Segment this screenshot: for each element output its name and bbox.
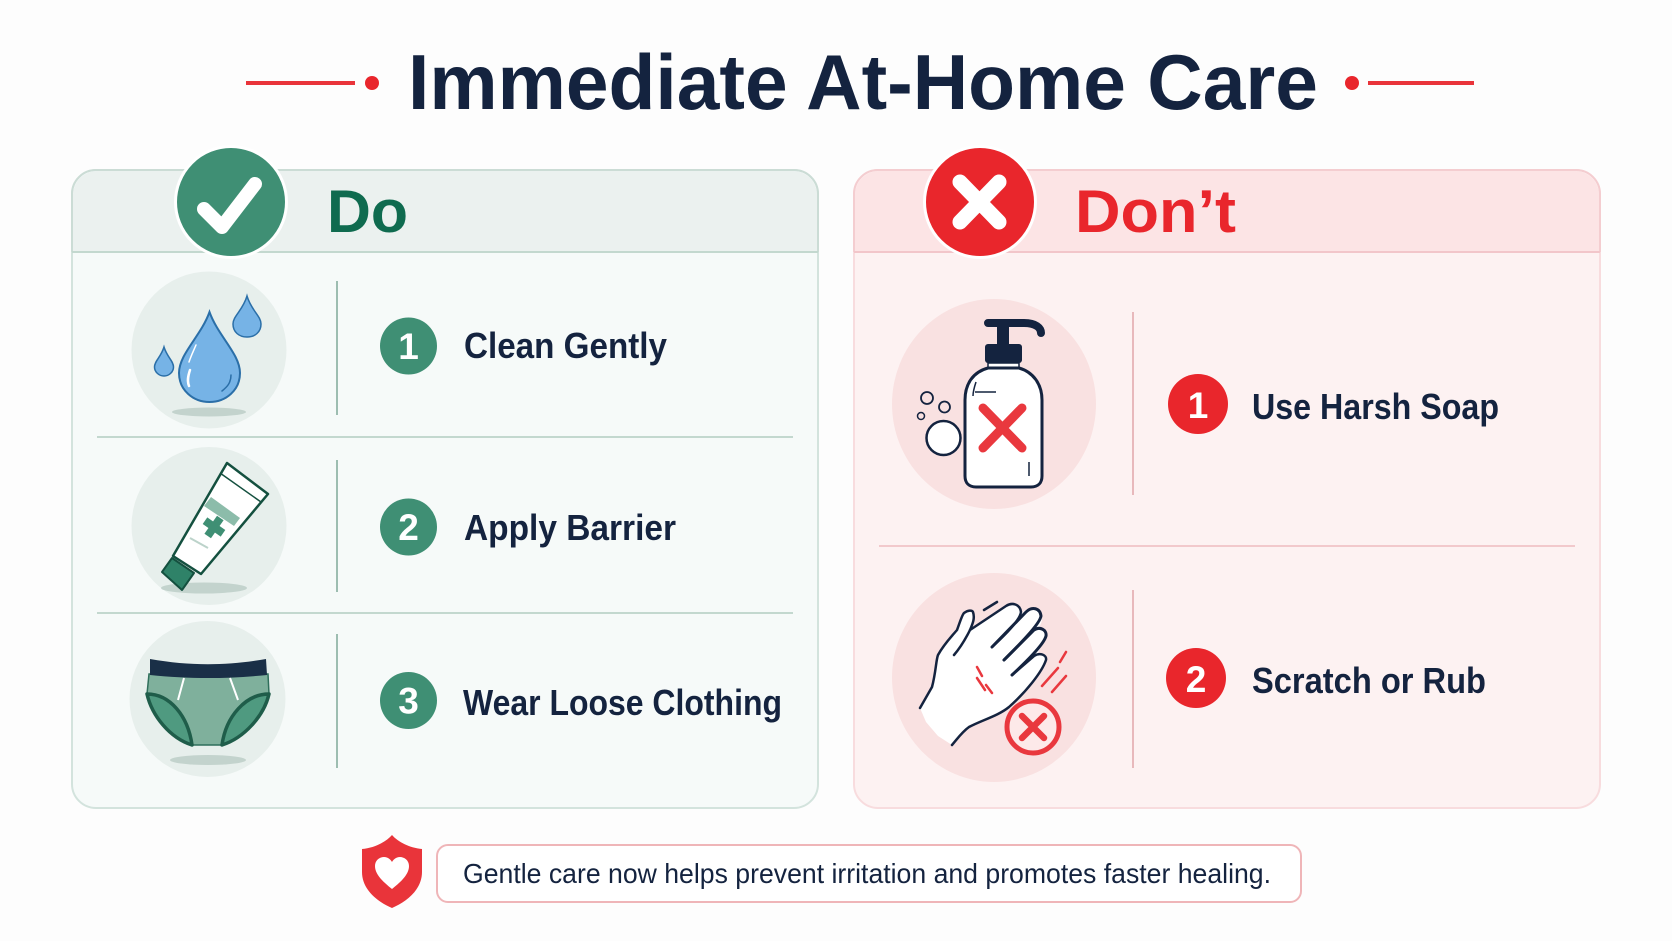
number badge 3 bbox=[380, 672, 437, 729]
label: use harsh soap: Use Harsh Soap bbox=[1252, 386, 1499, 427]
number badge 2: 2 bbox=[1186, 659, 1206, 700]
icon: water drops bbox=[132, 272, 286, 428]
number badge 1: 1 bbox=[398, 326, 419, 367]
row: wear loose clothing bbox=[130, 621, 782, 777]
heading: dont: Don’t bbox=[1075, 178, 1236, 245]
number badge 3: 3 bbox=[398, 680, 419, 722]
number badge 2 bbox=[1166, 648, 1226, 708]
icon: ointment tube bbox=[132, 447, 286, 605]
number badge 1 bbox=[380, 318, 437, 374]
row: apply barrier bbox=[132, 447, 676, 605]
callout: takeaway bbox=[437, 845, 1301, 902]
label: scratch or rub: Scratch or Rub bbox=[1252, 660, 1486, 701]
icon: soap bottle bbox=[892, 299, 1096, 509]
row: use harsh soap bbox=[892, 299, 1499, 509]
number badge 2 bbox=[380, 498, 437, 556]
icon: shield heart bbox=[362, 835, 422, 908]
icon: scratching hand bbox=[892, 573, 1096, 782]
number badge 2: 2 bbox=[398, 507, 419, 548]
label: apply barrier: Apply Barrier bbox=[464, 507, 676, 548]
number badge 1: 1 bbox=[1188, 385, 1208, 426]
row: scratch or rub bbox=[892, 573, 1486, 782]
icon: check badge bbox=[176, 146, 286, 258]
heading: do: Do bbox=[327, 178, 408, 245]
label: clean gently: Clean Gently bbox=[464, 325, 667, 366]
title: Immediate At-Home Care bbox=[408, 38, 1318, 126]
label: wear loose clothing: Wear Loose Clothing bbox=[463, 682, 782, 723]
icon: x badge bbox=[924, 146, 1036, 258]
icon: underwear bbox=[130, 621, 286, 777]
row: clean gently bbox=[132, 272, 667, 428]
number badge 1 bbox=[1168, 374, 1228, 434]
panel: dont bbox=[854, 146, 1600, 808]
callout: takeaway: Gentle care now helps prevent irritation and promotes faster healing. bbox=[463, 858, 1271, 889]
panel: do bbox=[72, 146, 818, 808]
